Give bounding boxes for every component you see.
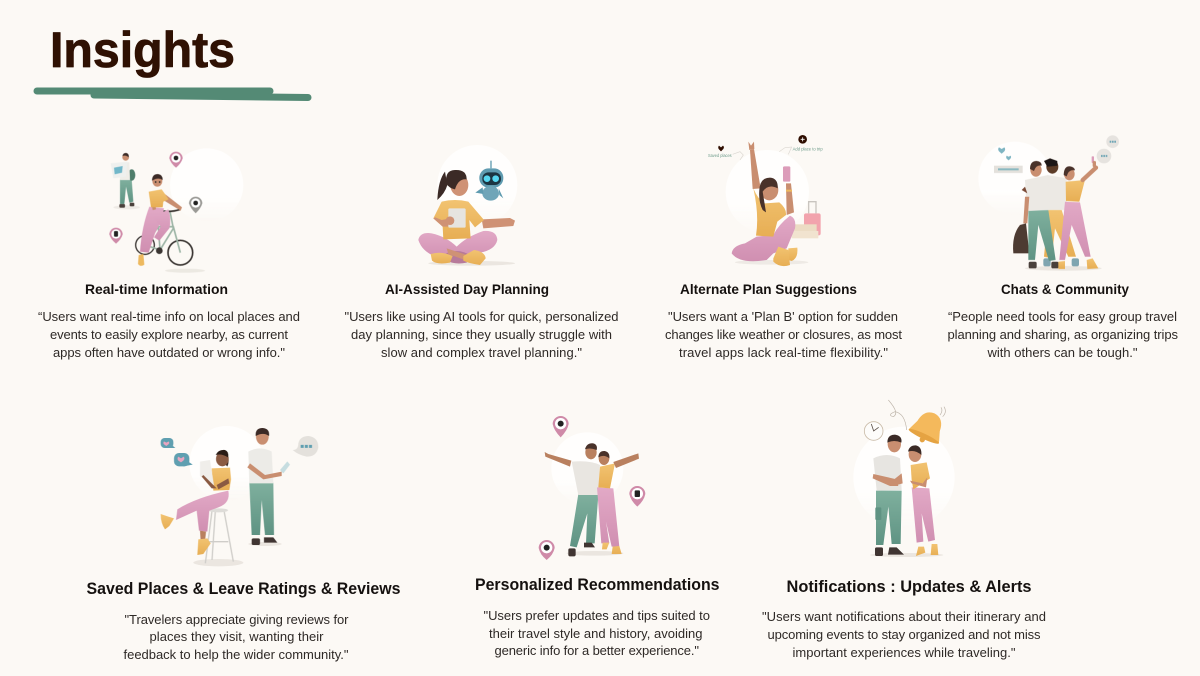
panel: AI-assisted day planning <box>344 145 618 360</box>
body text: generic info for a better experience." <box>494 643 699 658</box>
body text: changes like weather or closures, as most <box>665 327 902 342</box>
illustration: man with map and woman on bicycle with map pins <box>109 148 243 273</box>
illustration: couple with open arms and map pins <box>539 416 645 560</box>
body text: "Users want notifications about their itinerary and <box>762 609 1046 624</box>
body text <box>762 609 1046 660</box>
illustration: three friends taking selfie with chat bubbles <box>978 135 1119 271</box>
body text <box>38 309 300 360</box>
illustration: seated woman taking selfie with luggage <box>708 135 823 266</box>
heading: Alternate Plan Suggestions <box>680 281 857 297</box>
body text: their travel style and history, avoiding <box>489 626 702 641</box>
body text: “People need tools for easy group travel <box>948 309 1177 324</box>
body text <box>484 608 710 658</box>
body text: "Users prefer updates and tips suited to <box>484 608 710 623</box>
heading: AI-Assisted Day Planning <box>385 281 549 297</box>
panel: notifications <box>762 400 1046 660</box>
body text <box>948 309 1178 360</box>
body text: travel apps lack real-time flexibility." <box>679 345 888 360</box>
title underline brush stroke <box>37 91 308 98</box>
body text <box>344 309 618 360</box>
illustration: woman on stool and man reading phone with chat bubbles <box>161 426 318 566</box>
body text: important experiences while traveling." <box>792 645 1016 660</box>
body text <box>124 612 349 662</box>
body text: upcoming events to stay organized and not miss <box>768 627 1041 642</box>
heading: Chats & Community <box>1001 281 1129 297</box>
body text: planning and sharing, as organizing trips <box>948 327 1178 342</box>
body text: feedback to help the wider community." <box>124 647 349 662</box>
body text: “Users want real-time info on local places and <box>38 309 300 324</box>
body text: slow and complex travel planning." <box>381 345 582 360</box>
illustration: seated woman taking selfie with luggage: Add place to trip <box>793 146 823 151</box>
heading: Saved Places & Leave Ratings & Reviews <box>86 580 400 598</box>
illustration: couple checking phones with clock and bell <box>853 400 955 557</box>
body text: day planning, since they usually struggle with <box>351 327 612 342</box>
heading: Personalized Recommendations <box>475 576 720 594</box>
body text: "Users want a 'Plan B' option for sudden <box>668 309 898 324</box>
body text: "Users like using AI tools for quick, personalized <box>344 309 618 324</box>
body text <box>665 309 902 360</box>
panel: real-time information <box>38 148 300 360</box>
heading: Notifications : Updates & Alerts <box>786 578 1032 596</box>
title: Insights <box>50 22 235 78</box>
heading: Real-time Information <box>85 281 228 297</box>
body text: apps often have outdated or wrong info." <box>53 345 285 360</box>
body text: with others can be tough." <box>986 345 1138 360</box>
body text: events to easily explore nearby, as current <box>50 327 288 342</box>
body text: "Travelers appreciate giving reviews for <box>124 612 349 627</box>
panel: chats and community <box>948 135 1178 360</box>
panel: alternate plan suggestions <box>665 135 902 360</box>
body text: places they visit, wanting their <box>150 629 324 644</box>
panel: personalized recommendations <box>475 416 720 658</box>
illustration: seated woman with tablet and robot <box>418 145 517 266</box>
panel: saved places and reviews <box>86 426 400 662</box>
illustration: seated woman taking selfie with luggage: Saved places <box>708 153 732 158</box>
